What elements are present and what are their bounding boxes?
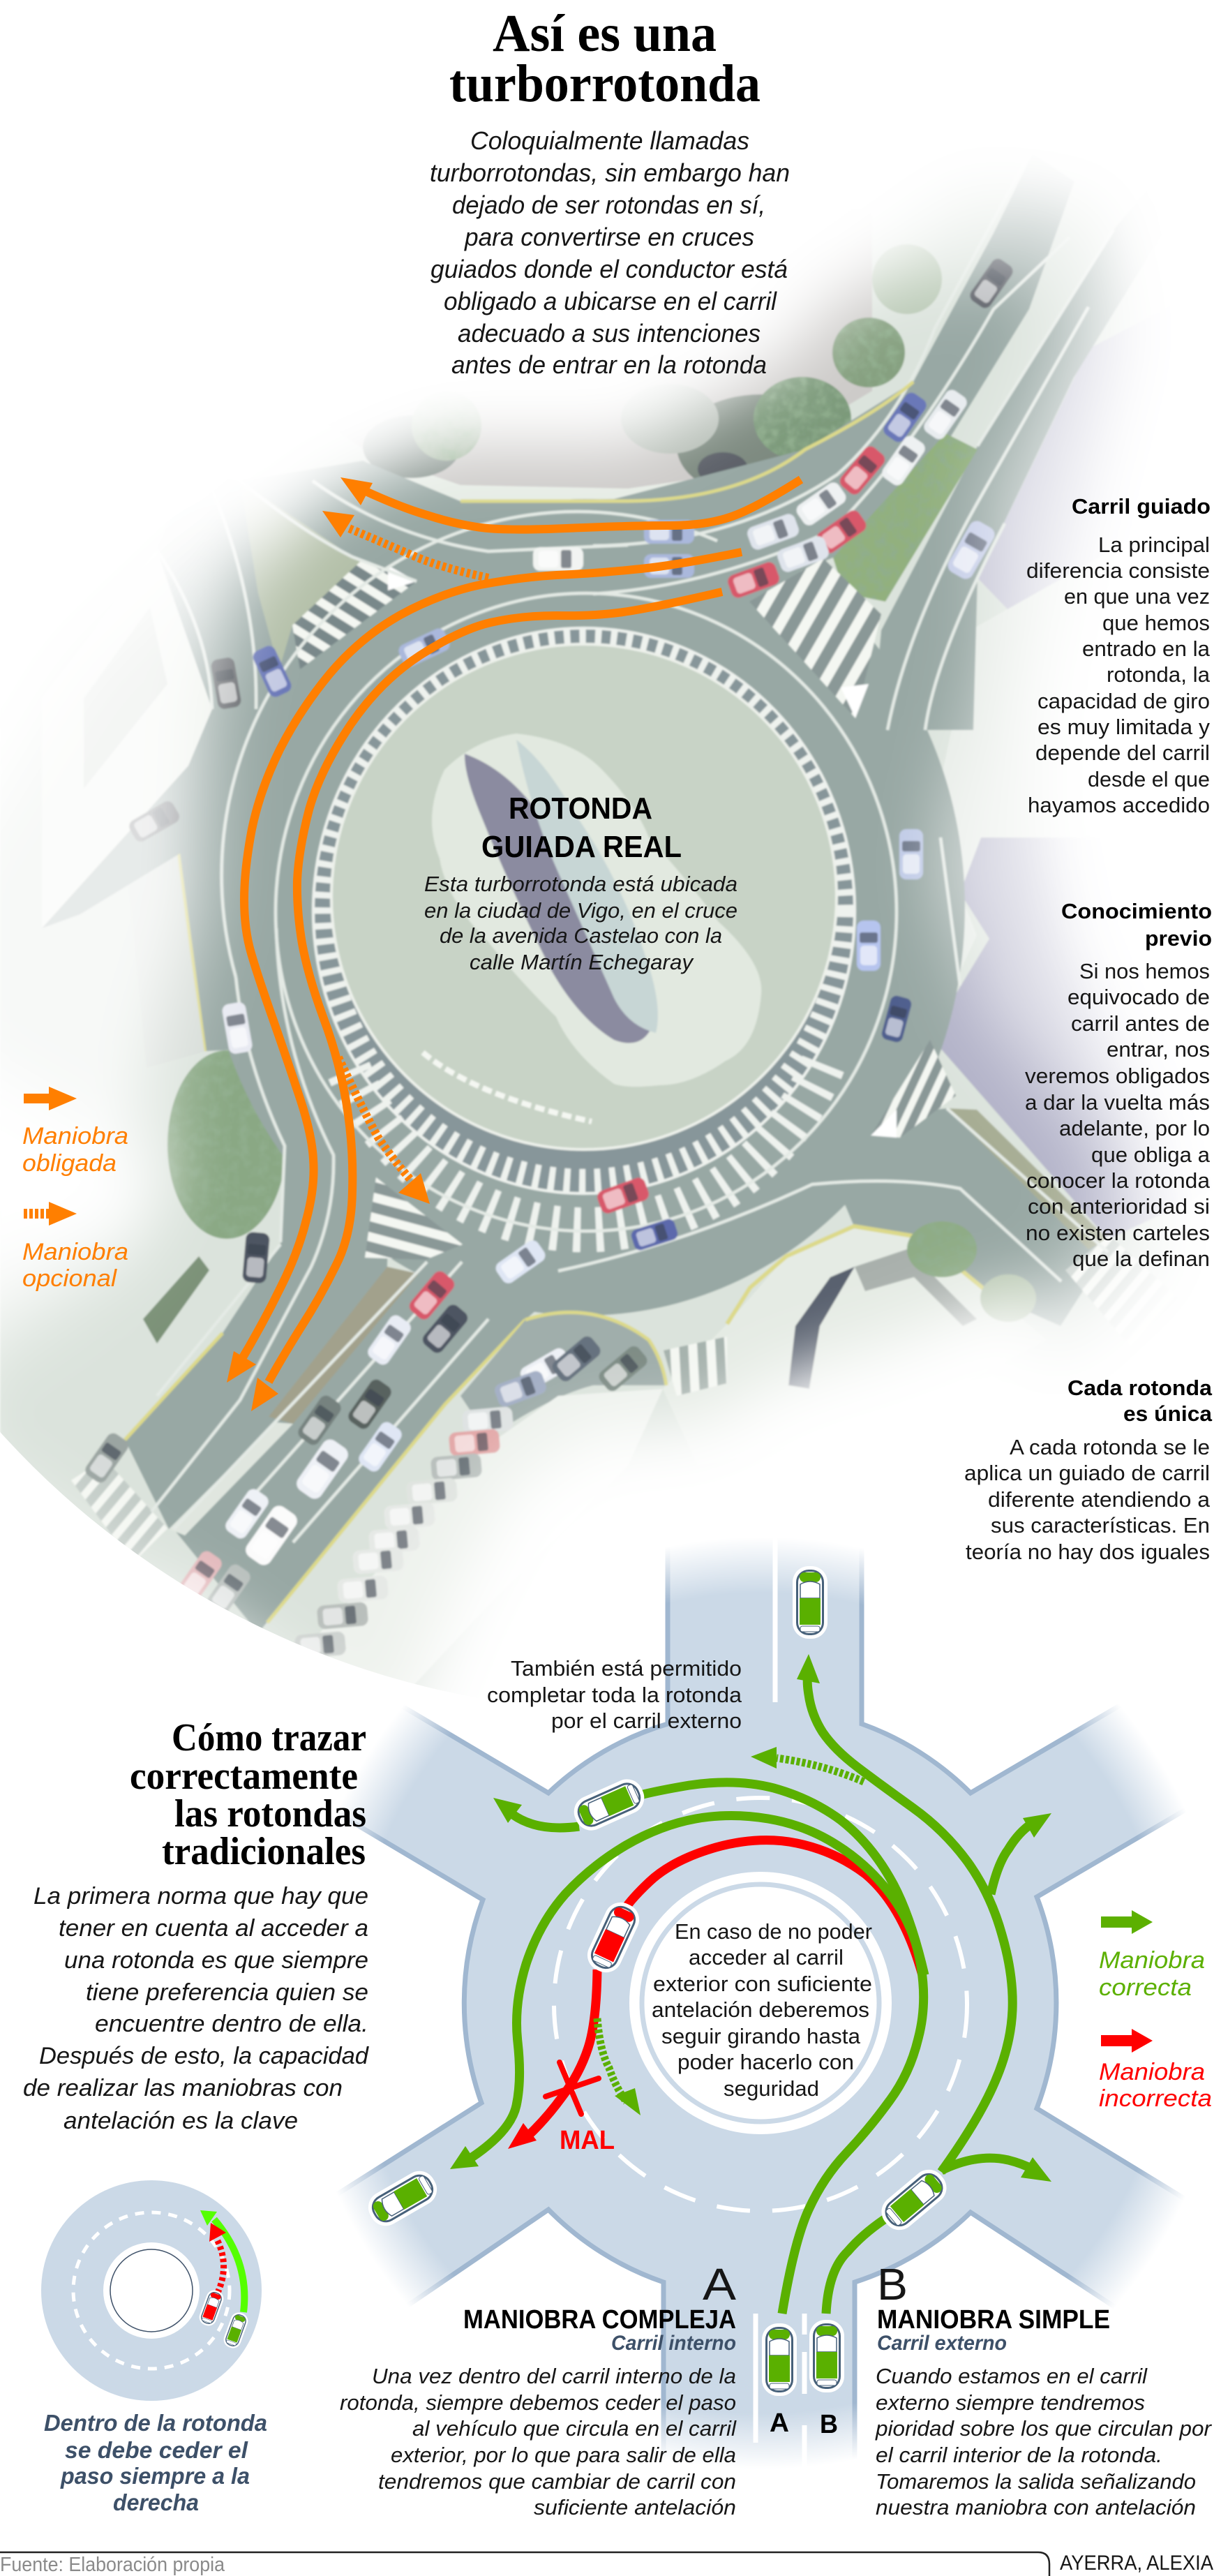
diagram cars [362, 1566, 953, 2396]
section intro text: encuentre dentro de ella. [95, 2011, 368, 2037]
side note: conocimiento previo: entrar, nos [1107, 1037, 1210, 1062]
diagram: route A, maniobra compleja [450, 1782, 924, 2314]
block B: maniobra simple: el carril interior de la rotonda. [876, 2443, 1162, 2467]
side note: conocimiento previo [1025, 899, 1212, 1271]
section intro text: tiene preferencia quien se [86, 1979, 368, 2006]
footer: Fuente: Elaboración propia [0, 2554, 225, 2576]
block A: maniobra compleja: rotonda, siempre debemos ceder el paso [340, 2390, 736, 2415]
side note: conocimiento previo: Conocimiento [1061, 899, 1212, 923]
footer [0, 2552, 1213, 2576]
note: tambien esta permitido: por el carril externo [551, 1708, 742, 1733]
side note: carril guiado: es muy limitada y [1038, 715, 1211, 739]
photo label: rotonda guiada real: de la avenida Castelao con la [440, 923, 722, 948]
block A: maniobra compleja: al vehículo que circula en el carril [412, 2416, 737, 2441]
legend: orange manoeuvres: opcional [22, 1265, 118, 1292]
side note: conocimiento previo: conocer la rotonda [1026, 1168, 1211, 1193]
road surface [42, 154, 1186, 1633]
south parking bay [300, 1312, 666, 1710]
note: tambien esta permitido: También está permitido [511, 1656, 742, 1681]
side note: conocimiento previo: no existen carteles [1026, 1221, 1210, 1245]
legend: orange manoeuvres: Maniobra [22, 1123, 128, 1149]
ground: south-east pavement and canal [663, 1221, 1047, 1466]
mini diagram caption: Dentro de la rotonda [44, 2410, 267, 2436]
block A: maniobra compleja: tendremos que cambiar de carril con [378, 2469, 736, 2494]
title: Así es una [493, 4, 717, 63]
aerial photo of the turbo-roundabout [0, 176, 1171, 1689]
legend: orange manoeuvres: Maniobra [22, 1239, 128, 1265]
side note: cada rotonda es única: sus características. En [991, 1513, 1210, 1538]
side note: carril guiado: entrado en la [1082, 636, 1211, 661]
side note: conocimiento previo: veremos obligados [1025, 1064, 1210, 1088]
block A: maniobra compleja: A [703, 2259, 736, 2309]
block B: maniobra simple [875, 2259, 1213, 2519]
block B: maniobra simple: pioridad sobre los que circulan por [875, 2416, 1213, 2441]
MAL label: MAL [560, 2126, 615, 2155]
side note: carril guiado [1026, 494, 1211, 817]
side note: carril guiado: La principal [1098, 533, 1210, 557]
section intro text: una rotonda es que siempre [64, 1947, 368, 1974]
section intro text: Después de esto, la capacidad [39, 2043, 369, 2069]
legend: correct and incorrect manoeuvres: Maniobra [1099, 2059, 1205, 2085]
side note: conocimiento previo: con anterioridad si [1028, 1194, 1210, 1219]
yellow kerbs [125, 382, 913, 1623]
intro text: para convertirse en cruces [464, 223, 754, 251]
intro text: turborrotondas, sin embargo han [430, 158, 790, 187]
block B: maniobra simple: MANIOBRA SIMPLE [877, 2305, 1110, 2335]
mini roundabout diagram [41, 2180, 262, 2401]
side note: carril guiado: hayamos accedido [1028, 793, 1210, 817]
note: tambien esta permitido [487, 1656, 742, 1733]
block A: maniobra compleja: Carril interno [611, 2332, 736, 2355]
note inside the island: exterior con suficiente [653, 1972, 872, 1996]
diagram: optional green dashed routes [597, 1747, 864, 2115]
section intro text: tener en cuenta al acceder a [59, 1915, 368, 1942]
lane labels A and B: B [820, 2410, 838, 2439]
ground: west block and tree [42, 544, 286, 1343]
legend: correct and incorrect manoeuvres [1099, 1910, 1212, 2112]
block B: maniobra simple: Tomaremos la salida señalizando [876, 2469, 1196, 2494]
side note: carril guiado: desde el que [1088, 767, 1210, 791]
cars in the aerial photo [82, 256, 1016, 1659]
block A: maniobra compleja [340, 2259, 737, 2519]
ground: top garden block [363, 245, 942, 500]
legend: correct and incorrect manoeuvres: correcta [1099, 1974, 1192, 2001]
side note: carril guiado: depende del carril [1035, 740, 1210, 765]
section heading: traditional roundabouts: Cómo trazar [172, 1716, 366, 1759]
mini diagram caption [44, 2410, 267, 2515]
note inside the island: antelación deberemos [652, 1997, 869, 2022]
median grass and islands [71, 433, 1179, 1563]
side note: cada rotonda es única: es única [1123, 1401, 1213, 1426]
intro text: antes de entrar en la rotonda [451, 350, 767, 379]
block A: maniobra compleja: suficiente antelación [534, 2495, 736, 2519]
diagram: route B, maniobra simple [797, 1654, 1051, 2314]
legend: orange manoeuvres [22, 1087, 128, 1292]
intro text: obligado a ubicarse en el carril [444, 287, 777, 315]
section heading: traditional roundabouts [130, 1716, 366, 1873]
side note: carril guiado: que hemos [1102, 611, 1210, 635]
diagram: wrong-way cross mark [546, 2062, 599, 2114]
block B: maniobra simple: B [877, 2259, 908, 2309]
intro text: adecuado a sus intenciones [458, 319, 761, 348]
legend: correct and incorrect manoeuvres: Maniobra [1099, 1947, 1205, 1974]
note inside the island: poder hacerlo con [677, 2050, 854, 2074]
side note: cada rotonda es única: Cada rotonda [1068, 1376, 1213, 1400]
side note: conocimiento previo: carril antes de [1071, 1011, 1210, 1036]
diagram: central island [629, 1872, 892, 2134]
lane labels A and B: A [770, 2409, 789, 2438]
side note: conocimiento previo: adelante, por lo [1059, 1116, 1210, 1140]
note inside the island [652, 1919, 872, 2101]
photo label: rotonda guiada real [424, 791, 737, 974]
section intro text: de realizar las maniobras con [23, 2075, 343, 2101]
side note: cada rotonda es única [964, 1376, 1213, 1564]
mini diagram caption: derecha [113, 2489, 199, 2515]
side note: cada rotonda es única: A cada rotonda se le [1010, 1435, 1210, 1459]
side note: carril guiado: en que una vez [1064, 584, 1210, 609]
block A: maniobra compleja: Una vez dentro del carril interno de la [372, 2364, 736, 2388]
intro text: dejado de ser rotondas en sí, [452, 191, 765, 219]
side note: conocimiento previo: a dar la vuelta más [1025, 1090, 1210, 1115]
side note: conocimiento previo: previo [1145, 926, 1212, 951]
side note: cada rotonda es única: teoría no hay dos iguales [966, 1540, 1210, 1564]
side note: conocimiento previo: que la definan [1072, 1246, 1210, 1271]
mini diagram caption: se debe ceder el [65, 2437, 248, 2463]
note inside the island: seguridad [724, 2076, 819, 2101]
title [449, 4, 761, 113]
section heading: traditional roundabouts: correctamente [130, 1755, 358, 1798]
lane labels A and B [770, 2409, 838, 2439]
diagram: incorrect red route [508, 1840, 922, 2149]
section heading: traditional roundabouts: las rotondas [174, 1792, 366, 1836]
section heading: traditional roundabouts: tradicionales [162, 1830, 366, 1873]
ground: east building shade [928, 279, 1221, 1239]
side note: conocimiento previo: Si nos hemos [1079, 959, 1210, 983]
side note: conocimiento previo: equivocado de [1068, 985, 1210, 1009]
intro text [430, 126, 790, 379]
photo label: rotonda guiada real: en la ciudad de Vigo, en el cruce [424, 898, 737, 923]
side note: carril guiado: rotonda, la [1107, 662, 1211, 687]
side note: carril guiado: diferencia consiste [1026, 558, 1210, 583]
photo label: rotonda guiada real: ROTONDA [509, 791, 652, 826]
block B: maniobra simple: nuestra maniobra con antelación [876, 2495, 1196, 2519]
lane markings [151, 161, 1114, 1542]
intro text: guiados donde el conductor está [430, 255, 788, 283]
side note: carril guiado: Carril guiado [1072, 494, 1211, 519]
block B: maniobra simple: Carril externo [877, 2332, 1007, 2355]
block A: maniobra compleja: exterior, por lo que para salir de ella [391, 2443, 736, 2467]
photo label: rotonda guiada real: Esta turborrotonda está ubicada [424, 872, 737, 896]
section intro text [23, 1883, 369, 2134]
side note: cada rotonda es única: diferente atendiendo a [988, 1487, 1211, 1512]
note: tambien esta permitido: completar toda la rotonda [487, 1683, 742, 1707]
legend: correct and incorrect manoeuvres: incorrecta [1099, 2085, 1212, 2112]
side note: conocimiento previo: que obliga a [1091, 1142, 1211, 1167]
photo label: rotonda guiada real: calle Martín Echegaray [470, 950, 695, 974]
photo label: rotonda guiada real: GUIADA REAL [481, 830, 682, 864]
title: turborrotonda [449, 54, 761, 113]
legend: orange manoeuvres: obligada [22, 1150, 117, 1177]
diagram: traditional roundabout road [314, 1535, 1207, 2485]
note inside the island: En caso de no poder [675, 1919, 872, 1944]
orange route arrows on the photo [227, 477, 801, 1411]
side note: carril guiado: capacidad de giro [1038, 689, 1210, 713]
intro text: Coloquialmente llamadas [470, 126, 749, 155]
note inside the island: seguir girando hasta [661, 2024, 861, 2048]
section intro text: antelación es la clave [63, 2108, 298, 2134]
note inside the island: acceder al carril [689, 1945, 844, 1970]
central island with hatched ring [313, 628, 855, 1230]
mini diagram caption: paso siempre a la [60, 2463, 250, 2489]
block A: maniobra compleja: MANIOBRA COMPLEJA [463, 2305, 736, 2335]
block B: maniobra simple: Cuando estamos en el carril [876, 2364, 1148, 2388]
section intro text: La primera norma que hay que [33, 1883, 368, 1909]
side note: cada rotonda es única: aplica un guiado de carril [964, 1461, 1210, 1485]
block B: maniobra simple: externo siempre tendremos [876, 2390, 1145, 2415]
